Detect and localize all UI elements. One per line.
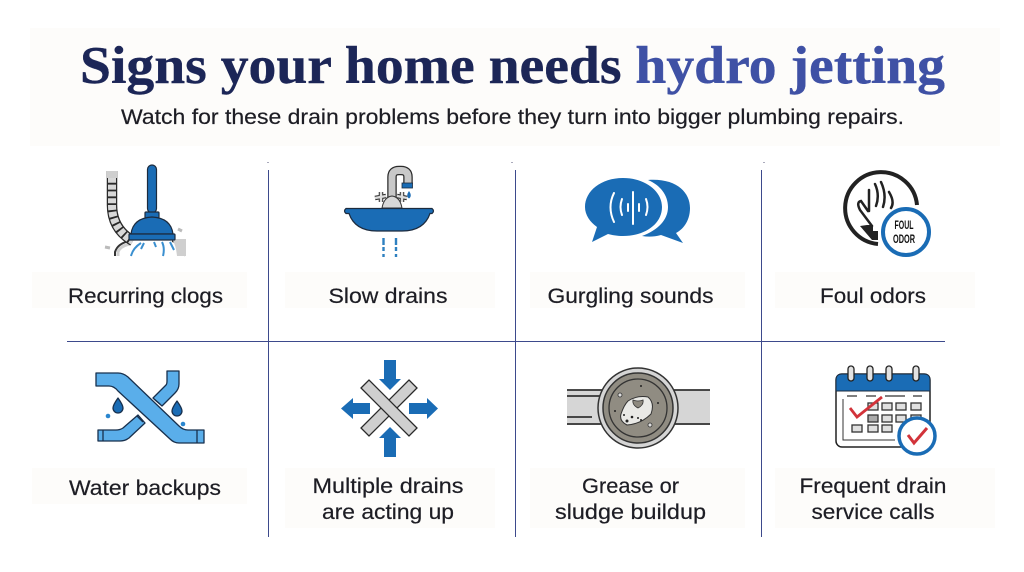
label: multiple drains are acting up: are acting up <box>322 501 454 524</box>
label: gurgling sounds: Gurgling sounds <box>548 285 714 308</box>
icon: slow draining sink <box>344 170 434 260</box>
icon: foul odor: FOUL <box>894 220 914 232</box>
label: multiple drains are acting up: Multiple drains <box>312 475 464 498</box>
label: grease or sludge buildup: sludge buildup <box>555 501 706 524</box>
icon: foul odor <box>845 172 929 255</box>
label: recurring clogs: Recurring clogs <box>68 285 223 308</box>
label: grease or sludge buildup: Grease or <box>582 475 679 498</box>
label: frequent drain service calls <box>800 475 946 524</box>
label: grease or sludge buildup <box>555 475 706 524</box>
icon: grease buildup in pipe <box>567 368 710 448</box>
icon: calendar with checkmarks <box>836 366 935 454</box>
title: Signs your home needs hydro jetting <box>80 37 945 95</box>
label: foul odors: Foul odors <box>820 285 926 308</box>
icon: plunger in clogged drain <box>105 165 186 256</box>
label: slow drains: Slow drains <box>328 285 448 308</box>
subtitle: Watch for these drain problems before they turn into bigger plumbing repairs. <box>121 105 904 129</box>
label: frequent drain service calls: service calls <box>812 501 934 524</box>
icon: gurgling speech bubbles <box>585 178 690 243</box>
label: water backups: Water backups <box>69 477 221 500</box>
label: multiple drains are acting up <box>312 475 464 524</box>
label: frequent drain service calls: Frequent drain <box>800 475 946 498</box>
icon: multiple drains arrows <box>341 360 438 457</box>
icon: backed up pipes <box>96 371 204 443</box>
icon: foul odor: ODOR <box>893 234 915 246</box>
